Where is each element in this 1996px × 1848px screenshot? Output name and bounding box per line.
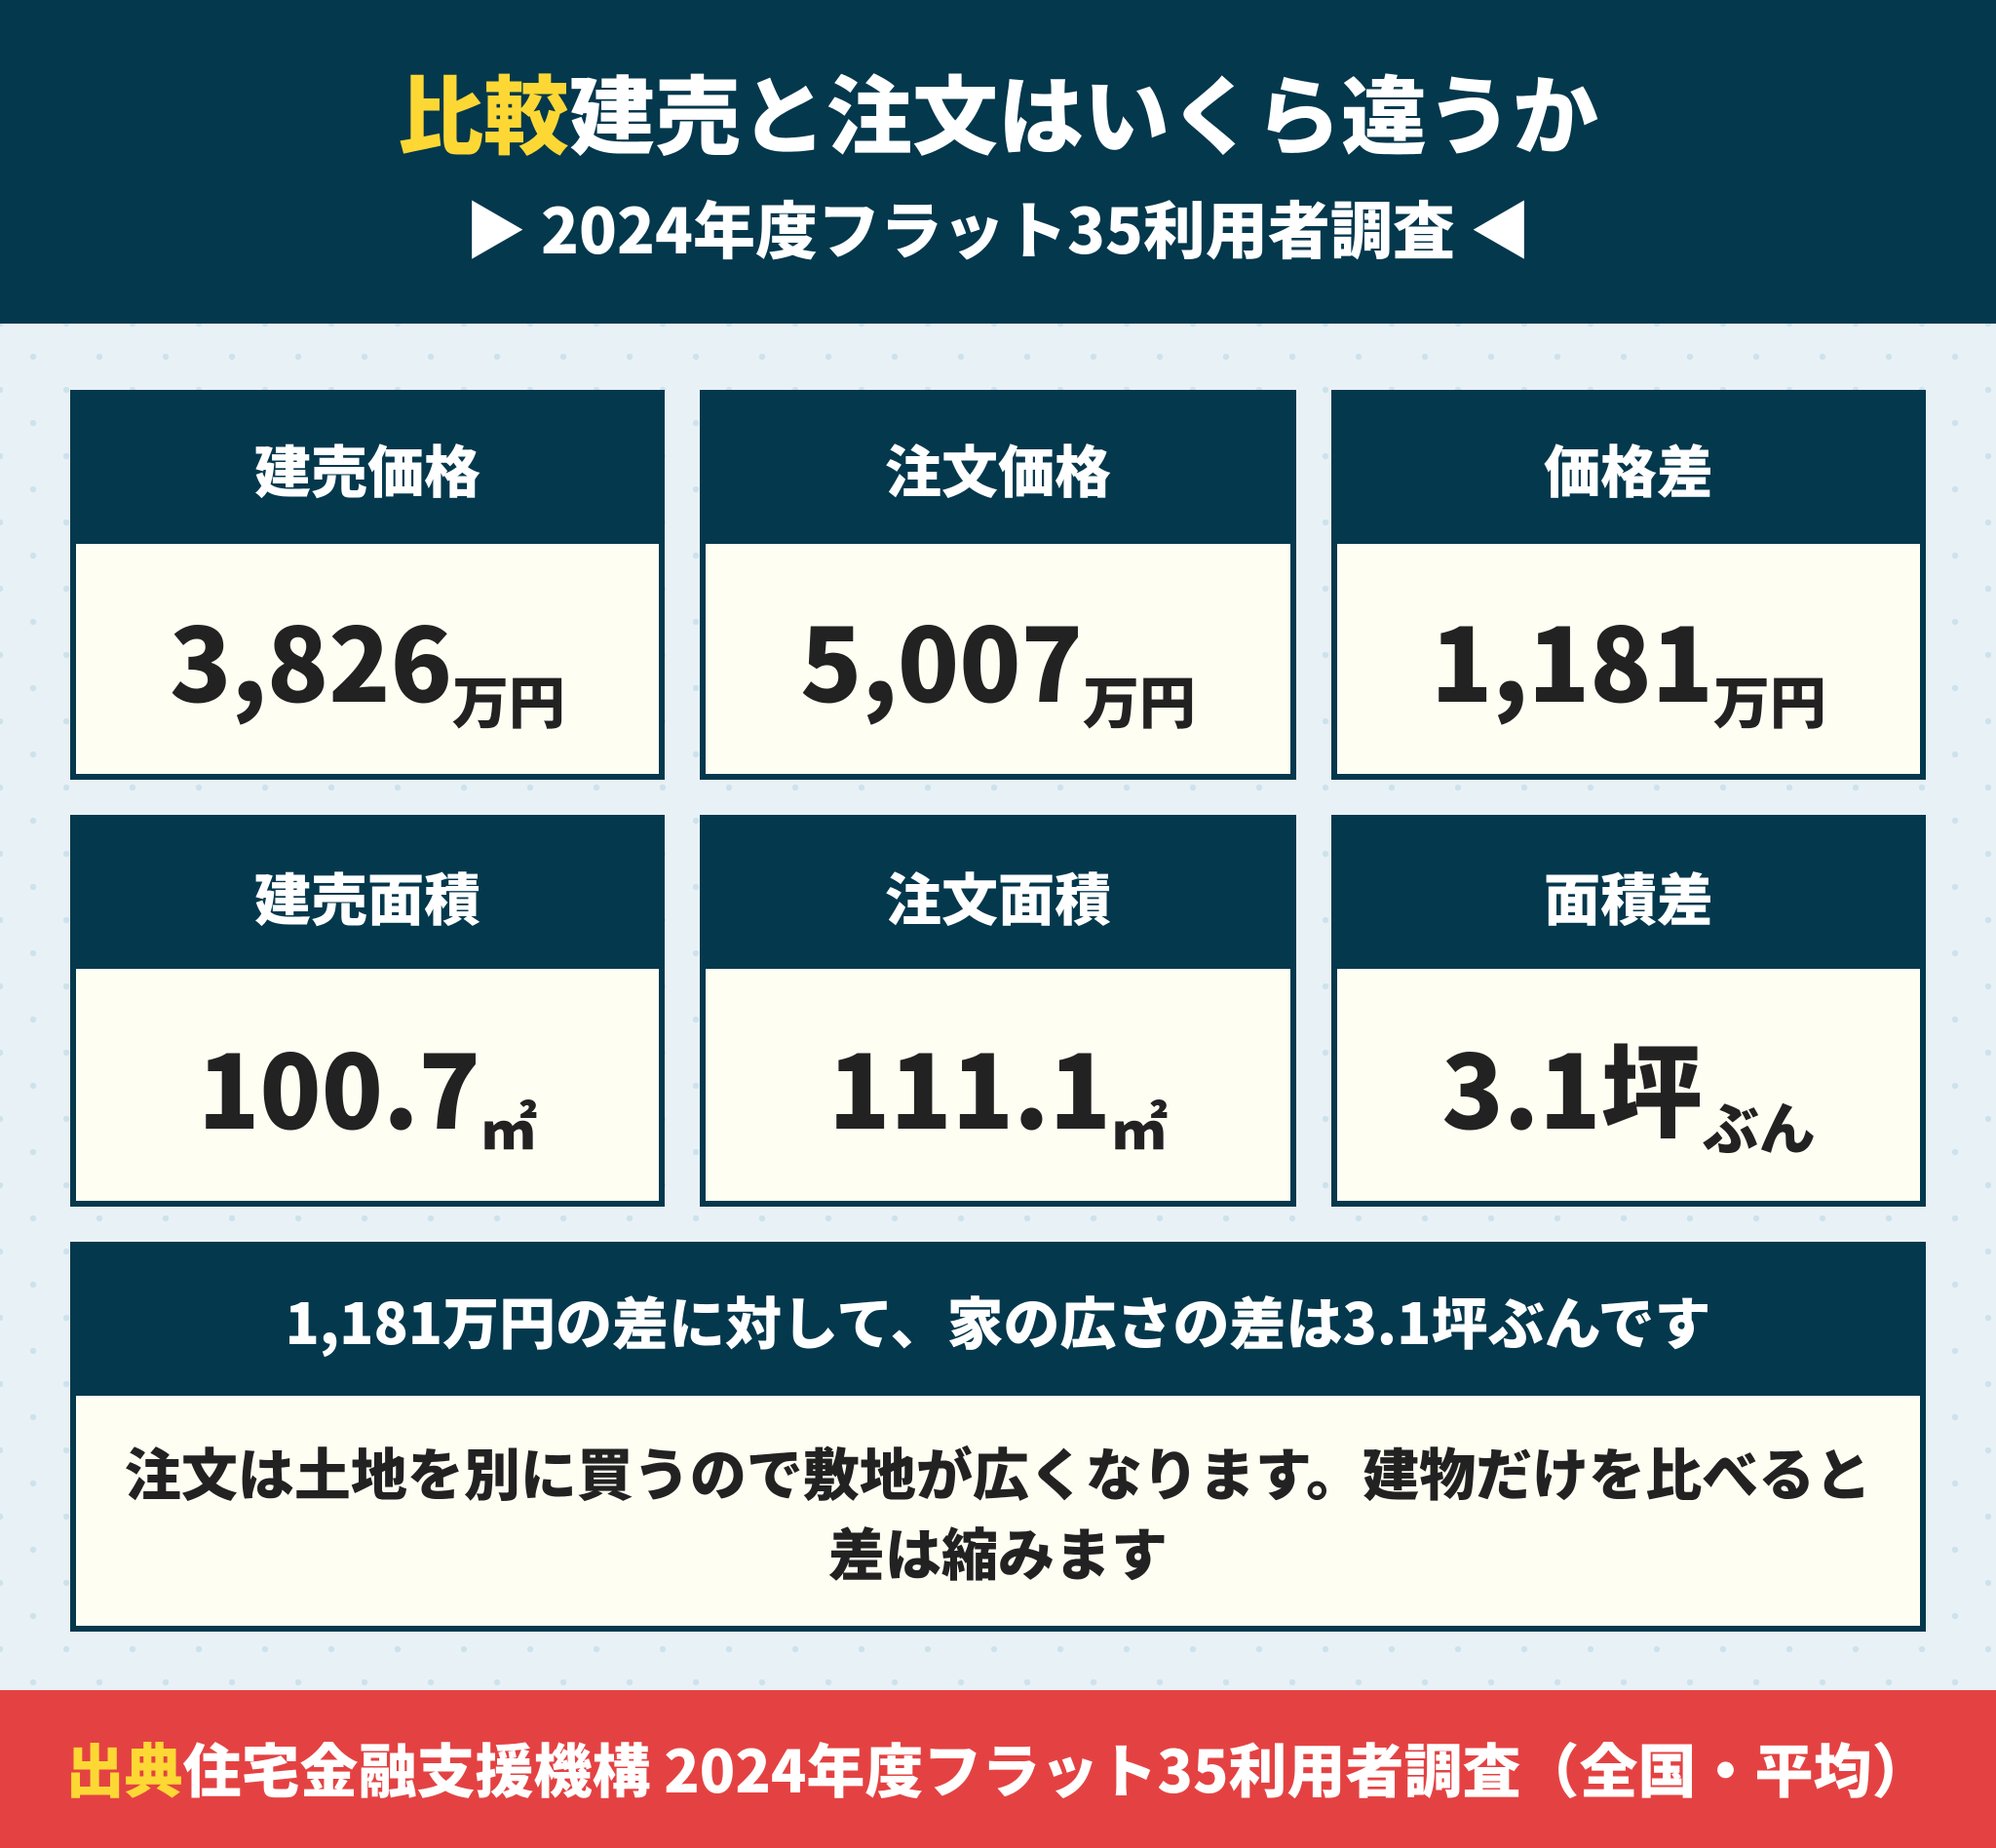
summary text: 注文は土地を別に買うので敷地が広くなります。建物だけを比べると — [125, 1430, 1871, 1512]
card value — [76, 969, 659, 1201]
source text: 出典住宅金融支援機構 2024年度フラット35利用者調査（全国・平均） — [66, 1725, 1930, 1810]
card value — [1337, 544, 1920, 774]
title: 比較建売と注文はいくら違うか — [398, 49, 1598, 173]
card value: 1,181万円 — [1431, 584, 1826, 740]
card value: 3.1坪ぶん — [1441, 1011, 1816, 1166]
card heading: 注文面積 — [885, 855, 1111, 937]
header band — [0, 0, 1996, 324]
card value — [1337, 969, 1920, 1201]
card: 注文面積 — [700, 815, 1296, 1207]
card heading: 建売面積 — [254, 855, 480, 937]
footer: source — [0, 1690, 1996, 1848]
card heading: 建売価格 — [254, 427, 480, 509]
card: 建売価格 — [70, 390, 665, 780]
summary text — [125, 1430, 1871, 1592]
summary heading: 1,181万円の差に対して、家の広さの差は3.1坪ぶんです — [285, 1279, 1711, 1361]
card value — [76, 544, 659, 774]
card: 価格差 — [1331, 390, 1926, 780]
card: 面積差 — [1331, 815, 1926, 1207]
card value — [706, 969, 1290, 1201]
card value: 3,826万円 — [170, 584, 565, 740]
summary text: 差は縮みます — [828, 1510, 1168, 1592]
summary body — [76, 1396, 1920, 1626]
panel: summary — [70, 1242, 1926, 1632]
card heading: 注文価格 — [885, 427, 1111, 509]
card value: 100.7㎡ — [198, 1011, 537, 1166]
card: 注文価格 — [700, 390, 1296, 780]
card heading: 価格差 — [1544, 427, 1713, 509]
card value — [706, 544, 1290, 774]
card: 建売面積 — [70, 815, 665, 1207]
card value: 5,007万円 — [800, 584, 1196, 740]
card value: 111.1㎡ — [828, 1011, 1168, 1166]
subtitle: ▶ 2024年度フラット35利用者調査 ◀ — [464, 182, 1532, 272]
card heading: 面積差 — [1544, 855, 1713, 937]
